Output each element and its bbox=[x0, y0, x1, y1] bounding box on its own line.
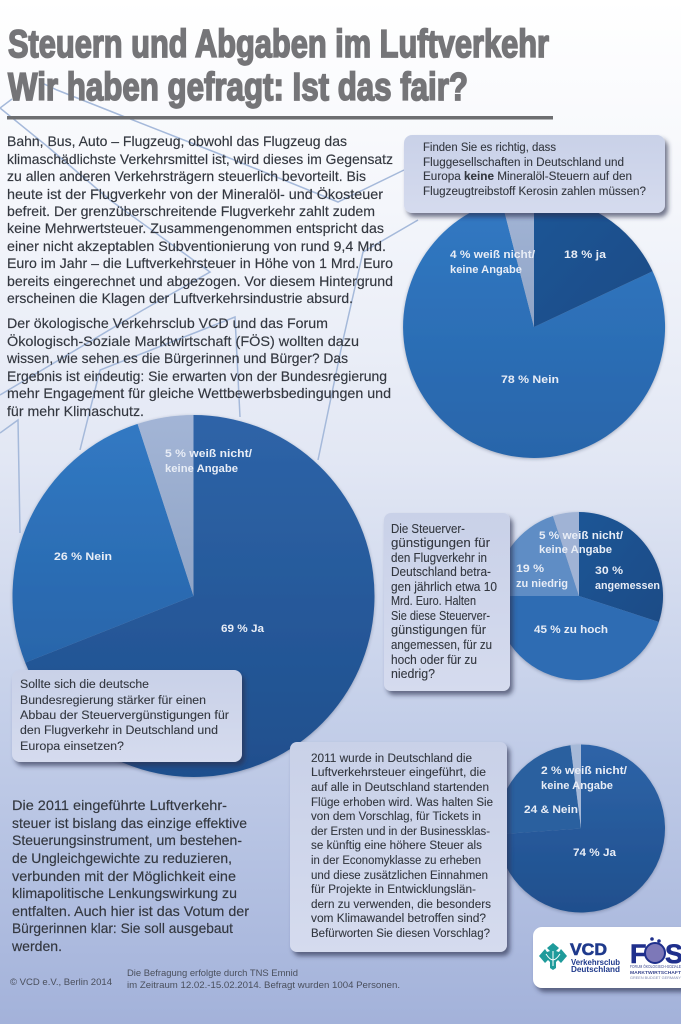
survey note: Die Befragung erfolgte durch TNS Emnid bbox=[127, 967, 298, 978]
slice: 74 % Ja bbox=[497, 744, 665, 912]
slice: 45 % zu hoch bbox=[495, 596, 659, 680]
FÖS wordmark: GREEN BUDGET GERMANY bbox=[630, 976, 681, 980]
pie labels: Luftverkehrsteuer bbox=[524, 765, 627, 859]
closing text paragraph bbox=[11, 797, 249, 954]
question box: Luftverkehrsteuer bbox=[290, 742, 507, 952]
pie labels: Luftverkehrsteuer: keine Angabe bbox=[541, 780, 613, 792]
title: Wir haben gefragt: Ist das fair? bbox=[8, 66, 468, 109]
question box: Luftverkehrsteuer: der Ersten und in der Businessklas- bbox=[311, 824, 490, 838]
flight route lines bbox=[0, 82, 418, 533]
question box: Luftverkehrsteuer: se künftig eine höhere Steuer als bbox=[311, 838, 482, 852]
question box: Steuervergünstigungen: Mrd. Euro. Halten bbox=[391, 593, 476, 608]
intro text paragraph 1 bbox=[7, 133, 393, 306]
question box: Steuervergünstigungen: gen jährlich etwa 10 bbox=[391, 579, 497, 594]
pie chart: Luftverkehrsteuer bbox=[497, 744, 665, 912]
pie labels: Kerosin bbox=[450, 249, 607, 386]
slice: 5 % weiß nicht bbox=[138, 415, 194, 596]
question box: Abbau der Steuervergünstigungen: Sollte sich die deutsche bbox=[20, 677, 149, 691]
question box: Steuervergünstigungen: Die Steuerver- bbox=[391, 521, 465, 536]
question box: Steuervergünstigungen: günstigungen für bbox=[391, 622, 487, 637]
intro text paragraph 1: heute ist der Flugverkehr von der Mineralöl- und Ökosteuer bbox=[7, 185, 383, 202]
slice: 18 % ja bbox=[534, 196, 653, 327]
question box: Kerosin: Flugzeugtreibstoff Kerosin zahlen müssen? bbox=[423, 184, 646, 198]
pie labels: Steuervergünstigungen: angemessen bbox=[595, 580, 660, 592]
question box: Luftverkehrsteuer: dern zu verwenden, die besonders bbox=[311, 897, 491, 911]
question box: Kerosin: Finden Sie es richtig, dass bbox=[423, 140, 556, 154]
closing text paragraph: Bürgerinnen klar: Sie soll ausgebaut bbox=[12, 920, 233, 936]
icon: VCD emblem bbox=[539, 943, 567, 970]
pie labels: Luftverkehrsteuer: 2 % weiß nicht/ bbox=[541, 765, 627, 777]
intro text paragraph 1: Euro im Jahr – die Luftverkehrsteuer in Höhe von 1 Mrd. Euro bbox=[7, 255, 393, 271]
FÖS wordmark: MARKTWIRTSCHAFT bbox=[630, 970, 681, 975]
logo panel bbox=[533, 927, 681, 988]
survey note bbox=[127, 967, 400, 990]
pie chart: Steuervergünstigungen bbox=[495, 512, 663, 680]
FÖS wordmark bbox=[630, 937, 681, 980]
closing text paragraph: de Ungleichgewichte zu reduzieren, bbox=[12, 850, 232, 866]
copyright: © VCD e.V., Berlin 2014 bbox=[10, 976, 112, 987]
intro text paragraph 1: bereits eingerechnet und abgezogen. Vor diesem Hintergrund bbox=[7, 273, 393, 289]
VCD wordmark: Verkehrsclub bbox=[571, 958, 620, 967]
closing text paragraph: werden. bbox=[11, 938, 62, 954]
closing text paragraph: klimapolitische Lenkungswirkung zu bbox=[12, 885, 237, 901]
pie labels: Steuervergünstigungen: keine Angabe bbox=[539, 544, 612, 556]
question box: Steuervergünstigungen: Sie diese Steuerver- bbox=[391, 608, 490, 623]
question box: Steuervergünstigungen: hoch oder für zu bbox=[391, 652, 477, 667]
title: Steuern und Abgaben im Luftverkehr bbox=[8, 23, 549, 66]
slice: 4 % weiß nicht bbox=[501, 196, 534, 327]
question box: Abbau der Steuervergünstigungen: Abbau der Steuervergünstigungen für bbox=[20, 708, 229, 722]
pie labels: Kerosin: keine Angabe bbox=[450, 264, 522, 276]
slice: 5 % weiß nicht bbox=[553, 512, 579, 596]
pie labels: Luftverkehrsteuer: 24 & Nein bbox=[524, 804, 578, 816]
closing text paragraph: steuer ist bislang das einzige effektive bbox=[12, 815, 247, 831]
question box: Luftverkehrsteuer: von dem Vorschlag, für Tickets in bbox=[311, 809, 481, 823]
question box: Luftverkehrsteuer: Flüge erhoben wird. Was halten Sie bbox=[311, 795, 493, 809]
slice: 69 % Ja bbox=[25, 415, 375, 777]
intro text paragraph 2: Der ökologische Verkehrsclub VCD und das Forum bbox=[7, 315, 328, 331]
slice: 26 % Nein bbox=[13, 424, 194, 663]
intro text paragraph 1: erscheinen die Klagen der Luftverkehrsindustrie absurd. bbox=[7, 290, 353, 306]
slice: 30 % angemessen bbox=[579, 512, 663, 622]
pie labels: Steuervergünstigungen: zu niedrig bbox=[516, 578, 568, 590]
FÖS wordmark: F bbox=[630, 939, 646, 969]
pie labels: Kerosin: 18 % ja bbox=[564, 249, 607, 261]
question box: Luftverkehrsteuer: Befürworten Sie diesen Vorschlag? bbox=[311, 926, 490, 940]
pie labels: Steuervergünstigungen: 45 % zu hoch bbox=[534, 624, 608, 636]
question box: Abbau der Steuervergünstigungen: Bundesregierung stärker für einen bbox=[20, 693, 206, 707]
question box: Kerosin: Europa keine Mineralöl-Steuern auf den bbox=[423, 169, 632, 183]
pie chart: Abbau der Steuervergünstigungen bbox=[13, 415, 375, 777]
intro text paragraph 2: Ökologisch-Soziale Marktwirtschaft (FÖS) wollten dazu bbox=[7, 332, 359, 349]
intro text paragraph 1: klimaschädlichste Verkehrsmittel ist, wird dieses im Gegensatz bbox=[7, 151, 393, 167]
question box: Kerosin: Fluggesellschaften in Deutschland und bbox=[423, 155, 624, 169]
survey note: im Zeitraum 12.02.-15.02.2014. Befragt wurden 1004 Personen. bbox=[127, 979, 400, 990]
pie labels: Steuervergünstigungen: 30 % bbox=[595, 565, 623, 577]
question box: Luftverkehrsteuer: für Projekte in Entwicklungslän- bbox=[311, 882, 476, 896]
pie labels: large pie: 5 % weiß nicht/ bbox=[165, 448, 252, 460]
closing text paragraph: Steuerungsinstrument, um bestehen- bbox=[12, 832, 242, 848]
pie labels: Kerosin: 78 % Nein bbox=[501, 374, 559, 386]
title rule bbox=[7, 116, 553, 120]
pie labels: large pie: 69 % Ja bbox=[221, 623, 265, 635]
intro text paragraph 2: für mehr Klimaschutz. bbox=[7, 403, 144, 419]
question box: Luftverkehrsteuer: und diese zusätzlichen Einnahmen bbox=[311, 868, 488, 882]
question box: Steuervergünstigungen: den Flugverkehr in bbox=[391, 550, 487, 565]
question box: Steuervergünstigungen bbox=[384, 513, 510, 691]
question box: Luftverkehrsteuer: in der Economyklasse zu erheben bbox=[311, 853, 481, 867]
intro text paragraph 2: Ergebnis ist eindeutig: Sie erwarten von der Bundesregierung bbox=[7, 368, 387, 384]
pie labels: large pie: keine Angabe bbox=[165, 463, 238, 475]
intro text paragraph 1: befreit. Der grenzüberschreitende Flugverkehr zahlt zudem bbox=[7, 203, 375, 219]
intro text paragraph 1: Bahn, Bus, Auto – Flugzeug, obwohl das Flugzeug das bbox=[7, 133, 347, 149]
question box: Abbau der Steuervergünstigungen bbox=[12, 670, 242, 762]
intro text paragraph 1: einer nicht akzeptablen Subventionierung von rund 9,4 Mrd. bbox=[7, 238, 386, 254]
closing text paragraph: Die 2011 eingeführte Luftverkehr- bbox=[12, 797, 227, 813]
pie labels: Steuervergünstigungen bbox=[516, 530, 660, 636]
question box: Luftverkehrsteuer: auf alle in Deutschland startenden bbox=[311, 780, 489, 794]
closing text paragraph: entfalten. Auch hier ist das Votum der bbox=[12, 903, 249, 919]
VCD wordmark: Deutschland bbox=[571, 965, 620, 974]
VCD wordmark: VCD bbox=[570, 940, 607, 959]
question box: Luftverkehrsteuer: vom Klimawandel betroffen sind? bbox=[311, 911, 486, 925]
intro text paragraph 1: zu allen anderen Verkehrsträgern steuerlich bevorteilt. Bis bbox=[7, 168, 366, 184]
pie labels: Luftverkehrsteuer: 74 % Ja bbox=[573, 847, 617, 859]
pie labels: Steuervergünstigungen: 19 % bbox=[516, 563, 544, 575]
pie labels: large pie: 26 % Nein bbox=[54, 551, 112, 563]
question box: Steuervergünstigungen: Deutschland betra- bbox=[391, 564, 491, 579]
question box: Kerosin bbox=[404, 135, 665, 213]
VCD wordmark bbox=[570, 940, 620, 974]
intro text paragraph 2: wissen, wie sehen es die Bürgerinnen und Bürger? Das bbox=[6, 350, 348, 366]
question box: Steuervergünstigungen: angemessen, für zu bbox=[391, 637, 492, 652]
pie labels: Steuervergünstigungen: 5 % weiß nicht/ bbox=[539, 530, 623, 542]
intro text paragraph 2: mehr Engagement für gleiche Wettbewerbsbedingungen und bbox=[7, 385, 391, 401]
pie labels: large pie bbox=[54, 448, 265, 635]
slice: 19 % zu niedrig bbox=[495, 516, 579, 596]
question box: Luftverkehrsteuer: 2011 wurde in Deutschland die bbox=[311, 751, 472, 765]
slice: 2 % weiß nicht bbox=[570, 744, 581, 828]
question box: Abbau der Steuervergünstigungen: Europa einsetzen? bbox=[20, 739, 124, 753]
title bbox=[8, 23, 549, 109]
question box: Abbau der Steuervergünstigungen: den Flugverkehr in Deutschland und bbox=[20, 723, 218, 737]
slice: 78 % Nein bbox=[403, 200, 665, 458]
closing text paragraph: verbunden mit der Möglichkeit eine bbox=[12, 868, 236, 884]
pie labels: Kerosin: 4 % weiß nicht/ bbox=[450, 249, 535, 261]
intro text paragraph 2 bbox=[6, 315, 391, 419]
question box: Steuervergünstigungen: niedrig? bbox=[391, 666, 435, 681]
question box: Luftverkehrsteuer: Luftverkehrsteuer eingeführt, die bbox=[311, 765, 486, 779]
intro text paragraph 1: keine Mehrwertsteuer. Zusammengenommen entspricht das bbox=[7, 220, 384, 236]
pie chart: Kerosin bbox=[403, 196, 665, 458]
question box: Steuervergünstigungen: günstigungen für bbox=[391, 535, 491, 550]
slice: 24 % Nein bbox=[497, 745, 581, 834]
